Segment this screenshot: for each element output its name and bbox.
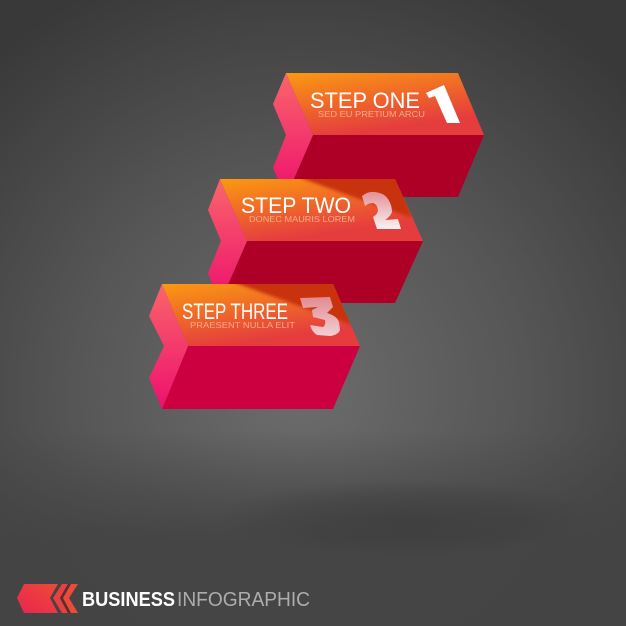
step one block (273, 73, 484, 197)
front face (220, 241, 423, 303)
subtext: DONEC MAURIS LOREM (249, 215, 355, 224)
brand text: BUSINESS (82, 589, 175, 611)
cast shadow (295, 176, 412, 218)
step three block (149, 281, 360, 409)
top face (286, 73, 484, 135)
subtext: SED EU PRETIUM ARCU (318, 110, 425, 119)
number 2 (362, 192, 401, 229)
number 3 (300, 297, 340, 336)
front face (162, 346, 360, 409)
heading: step three: STEP THREE (182, 299, 288, 324)
front face (286, 135, 484, 197)
heading: step two: STEP TWO (241, 193, 351, 218)
left face (149, 284, 188, 409)
number 1 (426, 85, 460, 123)
floor shadow (215, 480, 595, 556)
cast shadow (230, 281, 352, 325)
left face (208, 179, 247, 303)
icon: chevrons (17, 584, 78, 613)
heading: step one: STEP ONE (310, 88, 420, 113)
subtext: PRAESENT NULLA ELIT (190, 321, 295, 330)
step two block (208, 176, 423, 303)
logo: business infographic (17, 584, 310, 613)
logo: business infographic: INFOGRAPHIC (177, 589, 310, 611)
top face (162, 284, 360, 346)
top face (220, 179, 423, 241)
left face (273, 73, 313, 197)
